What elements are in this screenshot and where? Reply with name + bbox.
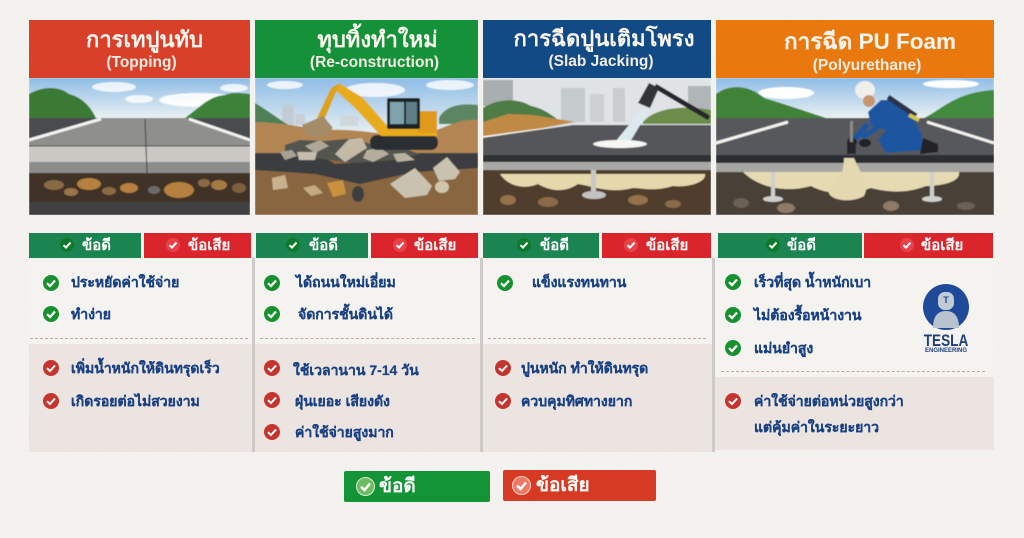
heading: topping	[29, 20, 250, 78]
tab: cons: ข้อเสีย	[414, 237, 456, 254]
icon: check	[725, 307, 741, 323]
con text: เพิ่มน้ำหนักให้ดินทรุดเร็ว	[71, 360, 220, 376]
icon: cons mark	[43, 360, 59, 376]
list background: slab jacking pros	[483, 258, 712, 344]
tab: cons: ข้อเสีย	[188, 237, 230, 254]
icon: cons mark	[43, 393, 59, 409]
panel: re-construction	[255, 20, 478, 258]
icon: check	[264, 275, 280, 291]
icon: check	[725, 274, 741, 290]
legend: pros	[344, 471, 490, 502]
pro text: แข็งแรงทนทาน	[532, 274, 626, 290]
tab: cons	[602, 233, 711, 258]
heading: PU foam: (Polyurethane)	[813, 57, 921, 74]
logo: Tesla Engineering: TESLA	[924, 331, 968, 350]
list background: PU foam cons	[715, 377, 994, 450]
icon: cons mark	[264, 360, 280, 376]
con text: ฝุ่นเยอะ เสียงดัง	[295, 393, 390, 409]
heading: slab jacking	[483, 20, 711, 78]
tab: pros	[718, 233, 862, 258]
tab: pros: ข้อดี	[309, 237, 338, 254]
pro text: ทำง่าย	[71, 306, 111, 322]
icon: cons mark	[495, 393, 511, 409]
legend: pros: ข้อดี	[379, 476, 416, 497]
list background: topping pros	[29, 258, 252, 344]
photo: excavator demolishing road	[255, 78, 478, 215]
photo: PU foam injection	[716, 78, 994, 215]
list background: re-construction pros	[255, 258, 480, 344]
pro text: ไม่ต้องรื้อหน้างาน	[754, 307, 861, 323]
list background: re-construction cons	[255, 344, 480, 452]
icon: cons mark	[725, 393, 741, 409]
icon: check	[497, 275, 513, 291]
icon: cons mark	[495, 360, 511, 376]
tab: pros: ข้อดี	[787, 237, 816, 254]
icon: cons mark	[264, 392, 280, 408]
pro text: จัดการชั้นดินได้	[298, 306, 393, 322]
logo: Tesla Engineering: ENGINEERING	[925, 348, 967, 354]
pro text: ประหยัดค่าใช้จ่าย	[71, 274, 179, 290]
con text: ค่าใช้จ่ายต่อหน่วยสูงกว่า	[754, 393, 904, 409]
heading: re-construction: ทุบทิ้งทำใหม่	[317, 27, 438, 52]
list background: topping cons	[29, 344, 252, 452]
icon: check	[264, 306, 280, 322]
legend: cons: ข้อเสีย	[536, 475, 590, 496]
panel: PU foam	[716, 20, 994, 258]
heading: re-construction	[255, 20, 478, 78]
panel: topping	[29, 20, 251, 258]
tab: pros	[483, 233, 599, 258]
pro text: แม่นยำสูง	[754, 340, 813, 356]
tab: cons	[864, 233, 993, 258]
tab: cons: ข้อเสีย	[646, 237, 688, 254]
photo: slab jacking injection	[483, 78, 711, 215]
heading: topping: การเทปูนทับ	[86, 27, 203, 52]
tab: pros	[256, 233, 368, 258]
con text continued: แต่คุ้มค่าในระยะยาว	[754, 419, 879, 435]
tab: pros: ข้อดี	[540, 237, 569, 254]
icon: check	[725, 340, 741, 356]
con text: ปูนหนัก ทำให้ดินทรุด	[521, 360, 648, 376]
pro text: ได้ถนนใหม่เอี่ยม	[296, 274, 396, 290]
icon: cons mark	[264, 424, 280, 440]
list background: PU foam pros	[715, 258, 994, 377]
con text: ใช้เวลานาน 7-14 วัน	[293, 362, 419, 378]
icon: check	[43, 275, 59, 291]
tab: cons: ข้อเสีย	[921, 237, 963, 254]
heading: topping: (Topping)	[106, 54, 177, 71]
heading: slab jacking: (Slab Jacking)	[548, 53, 654, 70]
con text: เกิดรอยต่อไม่สวยงาม	[71, 393, 200, 409]
logo: Tesla Engineering: T	[943, 295, 949, 305]
con text: ค่าใช้จ่ายสูงมาก	[295, 424, 394, 440]
tab: cons	[371, 233, 478, 258]
list background: slab jacking cons	[483, 344, 712, 452]
tab: cons	[144, 233, 251, 258]
heading: PU foam	[716, 20, 994, 78]
icon: check	[43, 306, 59, 322]
panel: slab jacking	[483, 20, 711, 258]
pro text: เร็วที่สุด น้ำหนักเบา	[754, 274, 871, 290]
tab: pros: ข้อดี	[82, 237, 111, 254]
heading: slab jacking: การฉีดปูนเติมโพรง	[514, 26, 694, 51]
tab: pros	[29, 233, 141, 258]
logo: Tesla Engineering	[923, 284, 969, 354]
con text: ควบคุมทิศทางยาก	[521, 393, 632, 409]
photo: topping road section	[29, 78, 250, 215]
heading: re-construction: (Re-construction)	[310, 54, 439, 71]
heading: PU foam: การฉีด PU Foam	[784, 29, 956, 54]
legend: cons	[503, 470, 656, 501]
